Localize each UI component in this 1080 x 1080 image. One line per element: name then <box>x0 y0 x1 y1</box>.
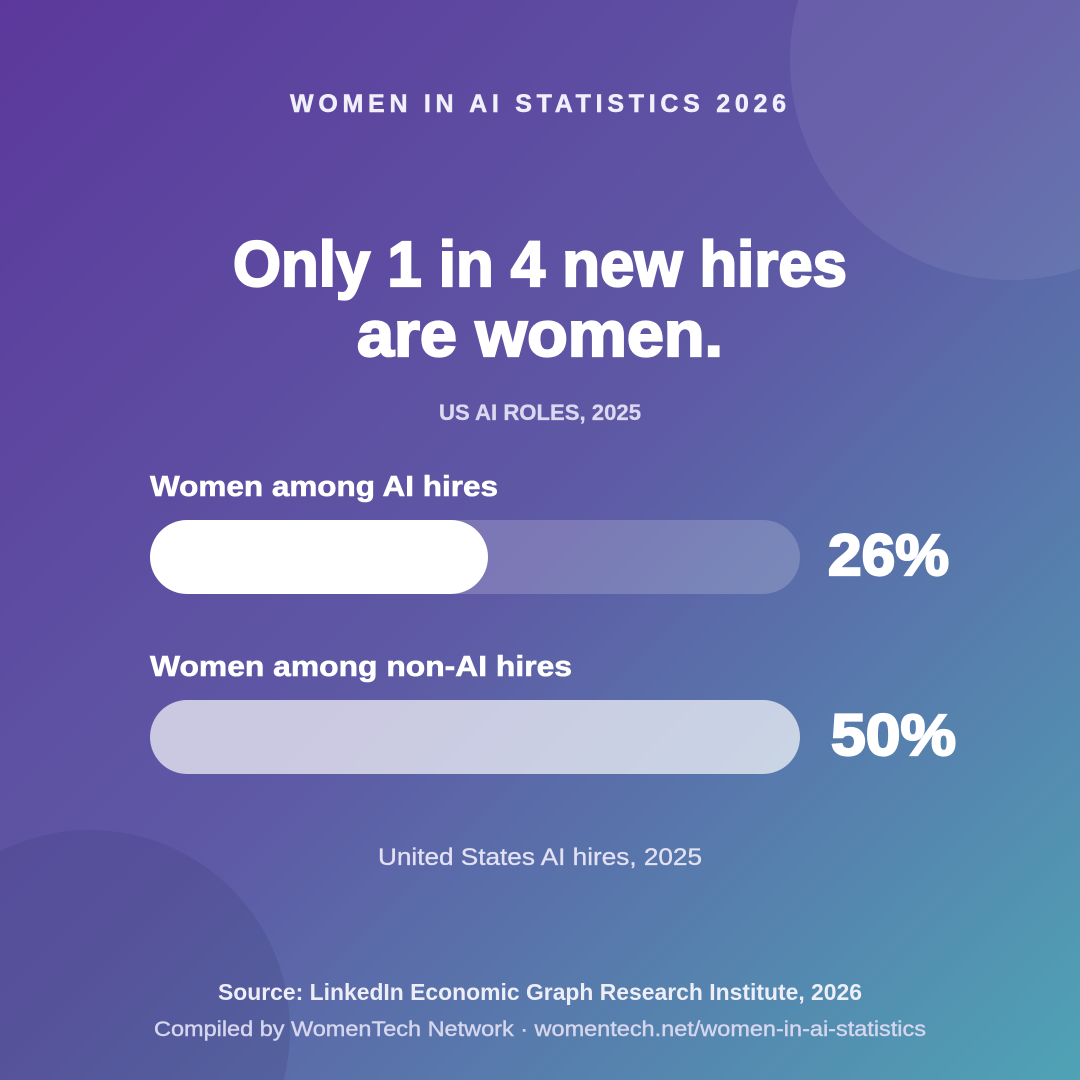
decorative circle: bottom left <box>0 830 290 1080</box>
value: 26% <box>828 523 949 588</box>
source line: Source: LinkedIn Economic Graph Research Institute, 2026 <box>218 979 862 1005</box>
decorative circle: top right <box>790 0 1080 280</box>
bar row: women among non-AI hires <box>150 651 956 774</box>
headline: are women. <box>357 298 723 370</box>
subtitle: US AI ROLES, 2025 <box>439 400 641 425</box>
bar row: women among AI hires <box>150 471 949 594</box>
geography note: United States AI hires, 2025 <box>378 844 702 871</box>
headline: Only 1 in 4 new hires <box>233 228 847 300</box>
label: Women among AI hires <box>150 471 498 503</box>
eyebrow title: WOMEN IN AI STATISTICS 2026 <box>290 90 786 118</box>
bar fill 50% <box>150 700 800 774</box>
compiled by line: Compiled by WomenTech Network · womentech.net/women-in-ai-statistics <box>154 1018 926 1041</box>
bar fill 26% <box>150 520 488 594</box>
headline <box>233 228 847 370</box>
value: 50% <box>831 703 956 768</box>
label: Women among non-AI hires <box>150 651 572 683</box>
bar track <box>150 520 800 594</box>
